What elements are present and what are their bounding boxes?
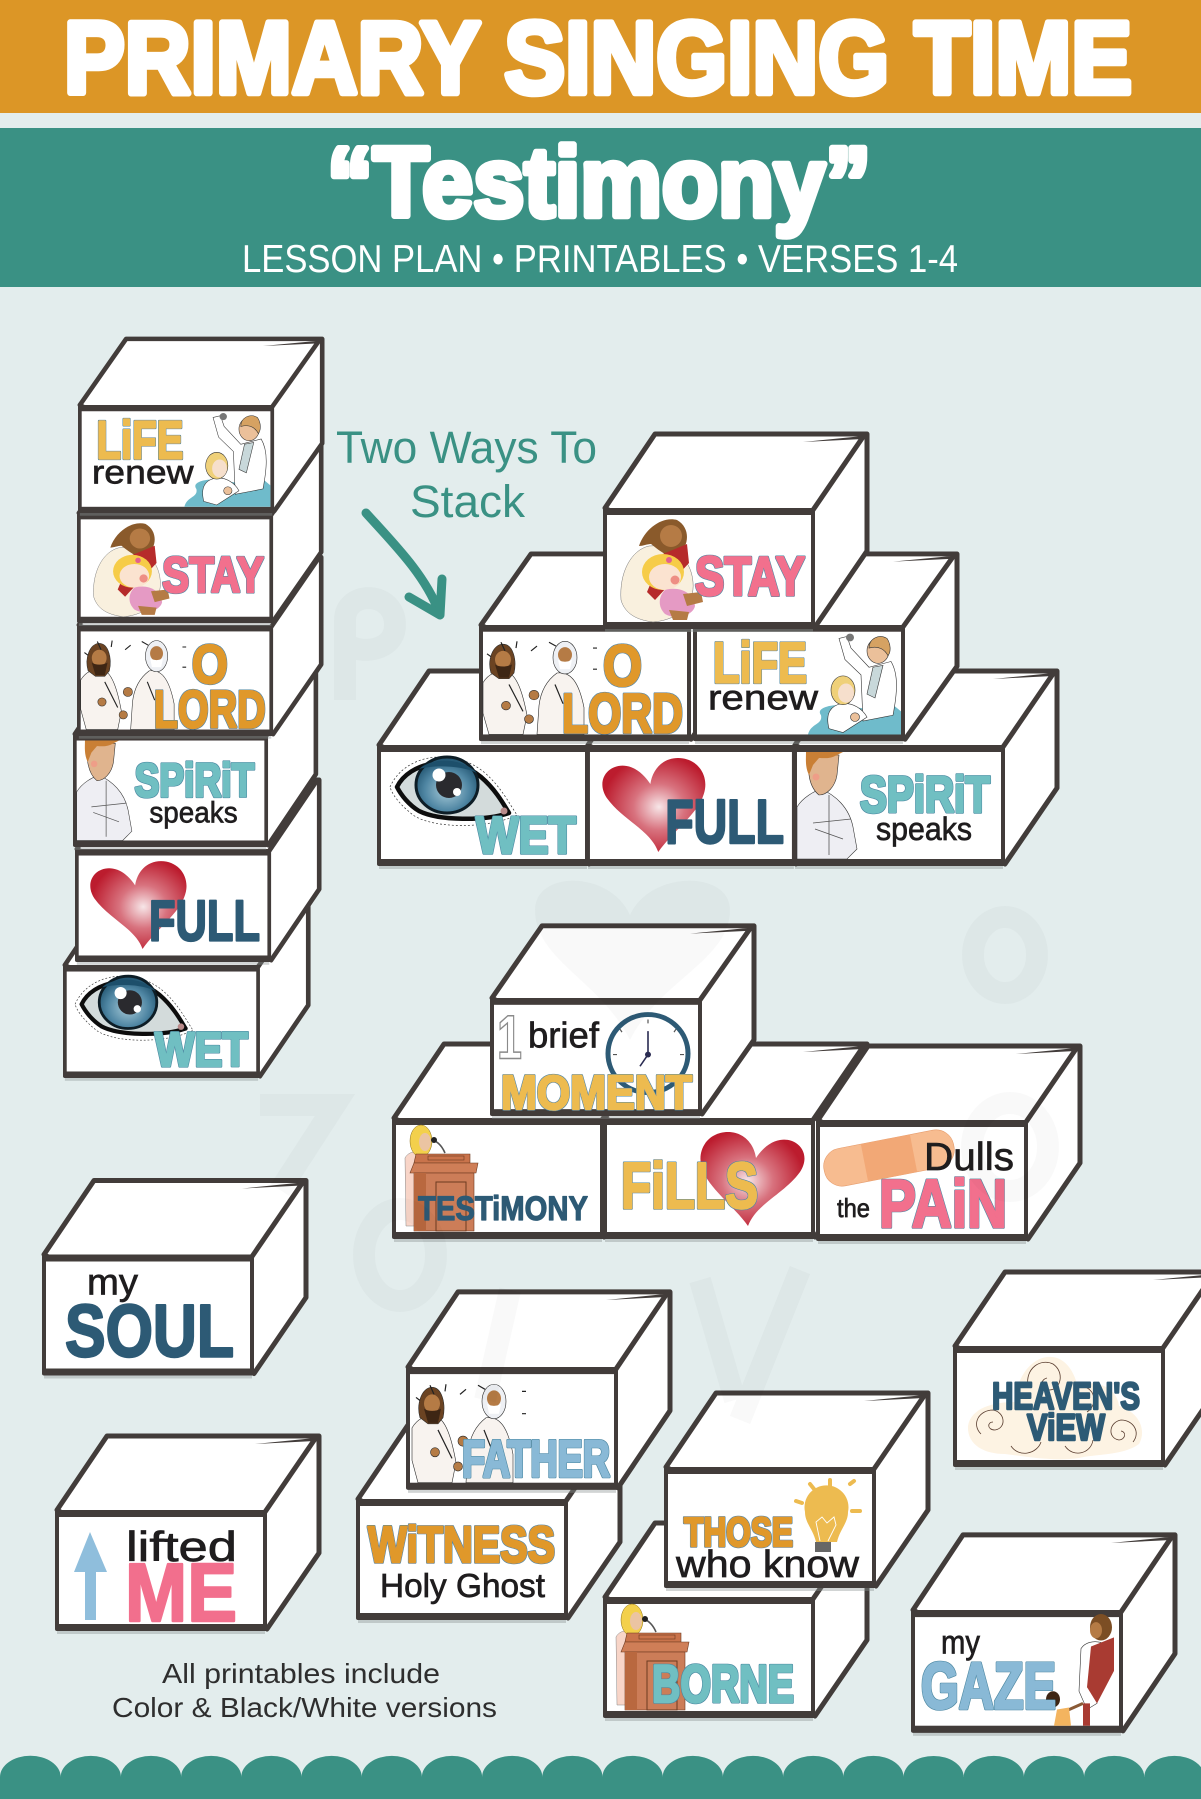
block: stay	[603, 434, 867, 632]
block: full	[586, 671, 847, 869]
block: one brief moment: 1	[497, 1003, 522, 1072]
block: spirit speaks: SPiRiT	[860, 766, 990, 823]
block: witness holy ghost: WiTNESS	[368, 1516, 555, 1573]
icon: clock	[608, 1015, 688, 1093]
subtitle banner	[0, 127, 1201, 287]
block: those who know: THOSE	[684, 1509, 793, 1555]
footer note: All printables include	[162, 1658, 440, 1689]
block: o lord: O	[192, 633, 228, 695]
block: life renew: renew	[708, 677, 819, 717]
block: my soul: my	[87, 1262, 139, 1302]
block: stay: STAY	[162, 547, 264, 603]
block: dulls the pain	[816, 1046, 1080, 1244]
block: lifted me: ME	[125, 1546, 237, 1639]
block: life renew: LiFE	[96, 410, 183, 470]
block: my soul: SOUL	[65, 1290, 234, 1372]
block: wet	[63, 896, 308, 1081]
callout: two ways to stack: Two Ways To	[336, 422, 597, 473]
block: spirit speaks	[73, 665, 316, 850]
block: o lord: LORD	[562, 684, 683, 745]
block: spirit speaks: SPiRiT	[135, 754, 254, 808]
block: life renew	[693, 554, 957, 744]
block: lifted me	[55, 1436, 319, 1639]
block: o lord	[77, 557, 321, 740]
block: life renew	[78, 339, 322, 516]
block: those who know: who know	[675, 1544, 860, 1586]
watermark shapes	[260, 598, 1048, 1420]
block: wet	[377, 671, 641, 869]
block: fills	[603, 1044, 867, 1242]
footer note	[112, 1658, 497, 1723]
subtitle text: LESSON PLAN • PRINTABLES • VERSES 1-4	[242, 238, 958, 281]
block: witness holy ghost: Holy Ghost	[380, 1567, 545, 1604]
block: borne: BORNE	[652, 1655, 794, 1714]
icon: light bulb	[796, 1480, 860, 1552]
block: full: FULL	[149, 889, 260, 954]
block: father: FATHER	[462, 1429, 610, 1488]
block: witness holy ghost	[356, 1425, 620, 1623]
block: life renew: renew	[92, 455, 194, 491]
block: wet: WET	[155, 1023, 248, 1077]
block: spirit speaks: speaks	[149, 797, 238, 830]
illustration: jesus and child	[1046, 1614, 1114, 1726]
block: heavens view	[953, 1272, 1201, 1470]
callout: two ways to stack	[336, 422, 597, 527]
block: stay	[77, 446, 321, 626]
block: stay: STAY	[695, 545, 805, 607]
block: my gaze	[911, 1535, 1175, 1736]
block: fills: FiLLS	[621, 1149, 758, 1222]
block: life renew: LiFE	[713, 632, 807, 695]
block: borne	[603, 1523, 867, 1721]
song title: “Testimony”	[327, 127, 871, 237]
block: o lord	[479, 554, 743, 745]
scalloped footer border	[0, 1756, 1201, 1799]
block: dulls the pain: PAiN	[879, 1166, 1007, 1242]
block: spirit speaks: speaks	[876, 811, 972, 847]
block: one brief moment: brief	[528, 1015, 600, 1056]
arrow: two ways to stack	[366, 513, 442, 615]
block: lifted me: lifted	[126, 1523, 237, 1570]
panel: first pyramid stack	[377, 434, 1057, 869]
block: full: FULL	[665, 788, 784, 857]
block: my gaze: my	[941, 1624, 980, 1662]
block: testimony: TESTiMONY	[418, 1190, 588, 1228]
header banner	[0, 0, 1201, 115]
block: father	[406, 1292, 670, 1493]
block: spirit speaks	[793, 671, 1057, 869]
block: my gaze: GAZE	[921, 1649, 1056, 1723]
callout: two ways to stack: Stack	[410, 476, 526, 527]
icon: bandage	[821, 1127, 957, 1189]
block: one brief moment: MOMENT	[501, 1067, 692, 1120]
panel: second pyramid stack	[392, 926, 1080, 1244]
footer note: Color & Black/White versions	[112, 1692, 497, 1723]
block: wet: WET	[476, 807, 576, 865]
panel: tall tower stack	[63, 339, 322, 1081]
block: dulls the pain: Dulls	[924, 1136, 1014, 1179]
block: o lord: LORD	[154, 681, 266, 740]
block: dulls the pain: the	[837, 1193, 870, 1223]
block: heavens view: HEAVEN'S	[992, 1376, 1140, 1418]
icon: swirl cloud	[968, 1357, 1142, 1459]
block: one brief moment	[490, 926, 754, 1120]
block: o lord: O	[603, 635, 642, 698]
block: those who know	[664, 1393, 928, 1591]
block: heavens view: ViEW	[1027, 1407, 1105, 1448]
block: full	[75, 780, 319, 965]
block: my soul	[42, 1180, 306, 1378]
icon: up arrow	[74, 1532, 107, 1620]
block: testimony	[392, 1044, 656, 1242]
